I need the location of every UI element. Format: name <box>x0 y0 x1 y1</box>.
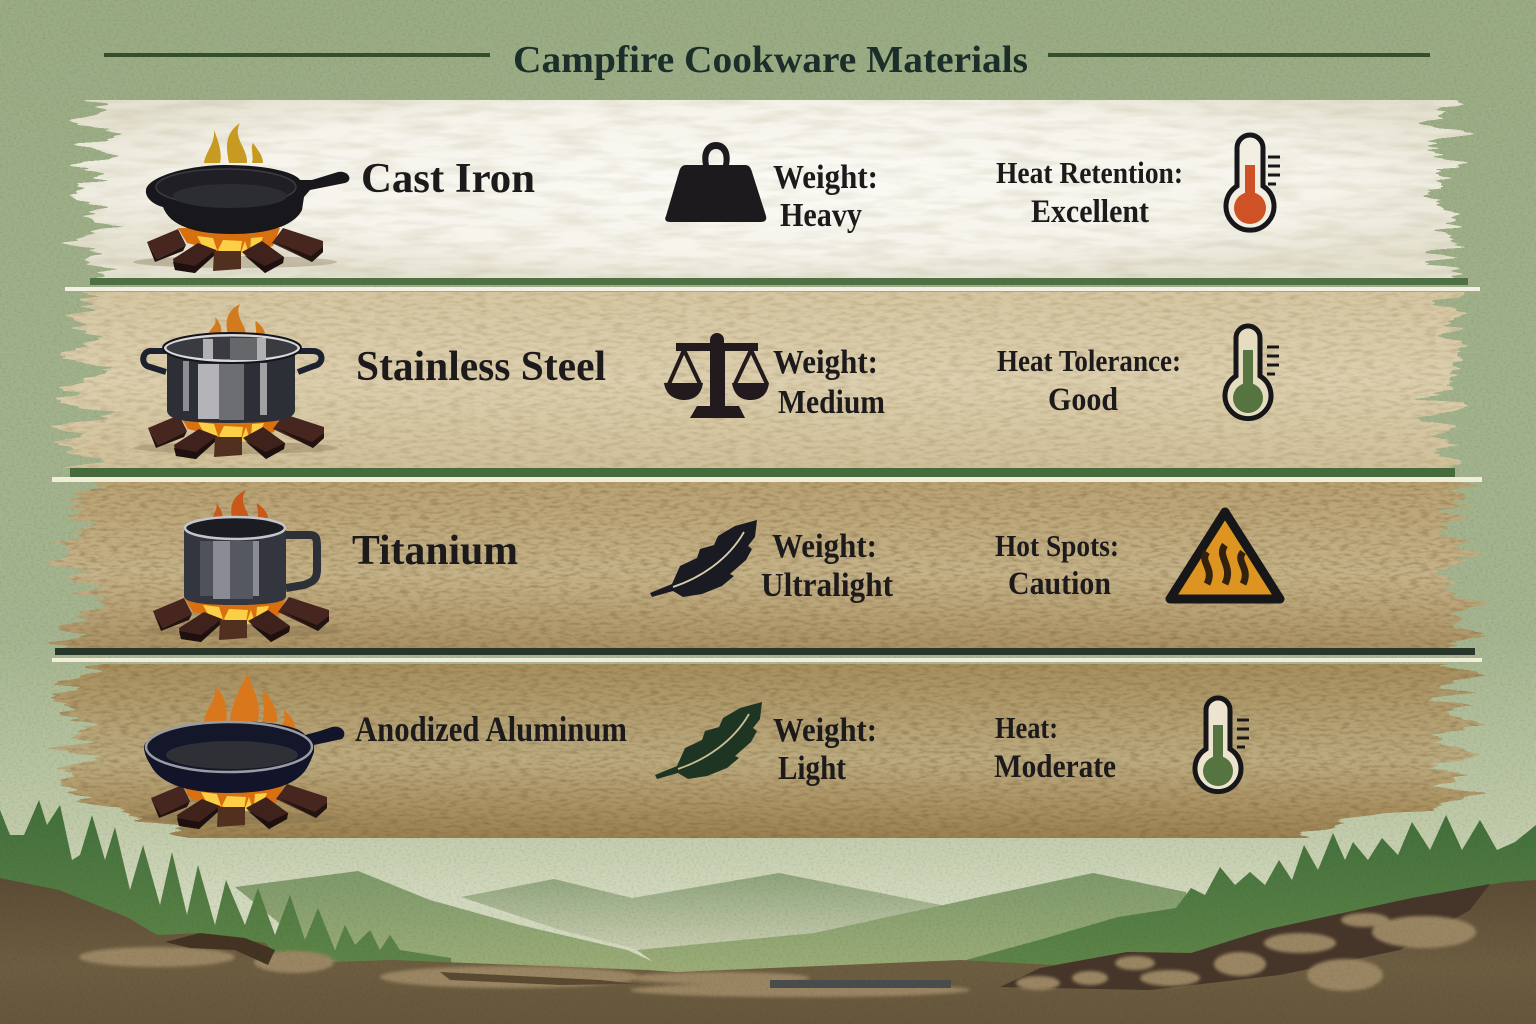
icon: kettle weight <box>665 142 766 222</box>
row dividers <box>52 278 1482 662</box>
icon: pot over campfire <box>134 304 338 459</box>
text: weight ultralight <box>761 528 894 604</box>
panel: cast iron band <box>92 100 1444 278</box>
text: weight medium: Weight: <box>773 344 878 381</box>
text: heat tolerance: Good <box>1048 382 1118 418</box>
text: weight medium <box>773 344 885 421</box>
text: weight light: Light <box>778 750 847 787</box>
panel: anodized aluminum band <box>76 664 1456 838</box>
landscape <box>0 800 1536 1024</box>
text: weight ultralight: Weight: <box>772 528 877 565</box>
text: heat moderate <box>994 710 1116 785</box>
icon: thermometer green <box>1225 326 1279 419</box>
heading: Anodized Aluminum: Anodized Aluminum <box>355 709 627 749</box>
icon: thermometer red <box>1226 135 1280 230</box>
text: heat tolerance: Heat Tolerance: <box>997 343 1181 378</box>
panel: stainless steel band <box>82 292 1450 468</box>
text: weight light: Weight: <box>773 712 877 749</box>
text: heat moderate: Moderate <box>994 749 1116 785</box>
row: cast iron <box>133 123 1280 273</box>
heading: Stainless Steel: Stainless Steel <box>356 344 606 390</box>
heading: Cast Iron: Cast Iron <box>361 156 535 202</box>
title <box>104 39 1430 81</box>
text: weight medium: Medium <box>778 384 885 421</box>
row: anodized aluminum <box>137 672 1249 829</box>
text: hot spots: Hot Spots: <box>995 528 1119 563</box>
text: heat moderate: Heat: <box>995 710 1058 745</box>
text: heat tolerance <box>997 343 1181 418</box>
text: hot spots: Caution <box>1008 566 1111 602</box>
heading: Titanium: Titanium <box>352 528 518 574</box>
icon: pan over campfire <box>137 672 344 829</box>
icon: thermometer moderate <box>1195 698 1249 792</box>
icon: hot surface warning <box>1170 512 1280 599</box>
title: Campfire Cookware Materials <box>513 39 1028 81</box>
text: weight heavy: Heavy <box>780 197 862 234</box>
text: weight light <box>773 712 877 787</box>
icon: skillet over campfire <box>133 123 349 273</box>
text: heat retention <box>996 155 1183 230</box>
icon: mug over campfire <box>139 490 343 642</box>
icon: feather green <box>655 702 762 779</box>
row: stainless steel <box>134 304 1279 459</box>
panel: titanium band <box>76 482 1458 649</box>
icon: balance scale <box>664 333 769 418</box>
text: weight heavy <box>773 159 878 234</box>
text: hot spots <box>995 528 1119 602</box>
text: weight heavy: Weight: <box>773 159 878 196</box>
text: weight ultralight: Ultralight <box>761 567 894 604</box>
text: heat retention: Heat Retention: <box>996 155 1183 190</box>
icon: feather black <box>650 520 757 597</box>
row: titanium <box>139 490 1280 642</box>
text: heat retention: Excellent <box>1031 194 1149 230</box>
